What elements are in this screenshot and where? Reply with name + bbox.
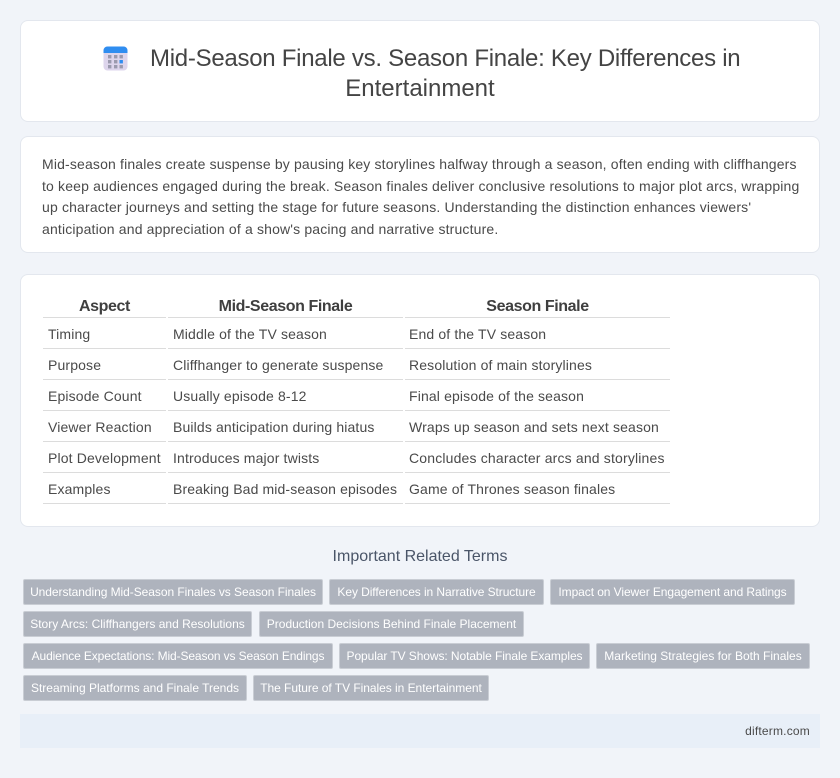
description text: anticipation and appreciation of a show's pacing and narrative structure. xyxy=(42,220,498,236)
related term tags: The Future of TV Finales in Entertainment xyxy=(260,681,482,695)
description text: up character journeys and setting the stage for future seasons. Understanding the distinction enhances viewers' xyxy=(42,199,751,215)
comparison table: Mid-Season Finale xyxy=(219,298,352,315)
related term tags: Impact on Viewer Engagement and Ratings xyxy=(558,585,787,599)
related term tags: Story Arcs: Cliffhangers and Resolutions xyxy=(30,617,245,631)
comparison table: Usually episode 8-12 xyxy=(173,388,307,404)
related term tags: Audience Expectations: Mid-Season vs Season Endings xyxy=(32,649,324,663)
heading: related terms: Important Related Terms xyxy=(333,548,507,565)
description text: to keep audiences engaged during the break. Season finales deliver conclusive resolutions to major plot arcs, wrapping xyxy=(42,178,799,194)
icon: calendar xyxy=(104,46,128,70)
related term tags: Production Decisions Behind Finale Placement xyxy=(267,617,516,631)
header card: Mid-Season Finale vs. Season Finale: Key Differences in xyxy=(150,45,740,72)
footer credit: difterm.com xyxy=(745,724,810,738)
comparison table: Middle of the TV season xyxy=(173,326,327,342)
comparison table: End of the TV season xyxy=(409,326,546,342)
comparison table: Builds anticipation during hiatus xyxy=(173,419,375,435)
comparison table: Introduces major twists xyxy=(173,450,319,466)
comparison table: Wraps up season and sets next season xyxy=(409,419,659,435)
related term tags: Understanding Mid-Season Finales vs Season Finales xyxy=(30,585,316,599)
comparison table xyxy=(43,298,670,504)
panel: comparison table xyxy=(20,274,820,527)
comparison table: Final episode of the season xyxy=(409,388,584,404)
header card: Entertainment xyxy=(345,75,495,102)
title xyxy=(150,45,740,102)
comparison table: Season Finale xyxy=(486,298,589,315)
comparison table: Timing xyxy=(48,326,90,342)
comparison table: Episode Count xyxy=(48,388,142,404)
description text: Mid-season finales create suspense by pausing key storylines halfway through a season, often ending with cliffhangers xyxy=(42,156,797,172)
related term tags: Popular TV Shows: Notable Finale Examples xyxy=(347,649,582,663)
comparison table: Breaking Bad mid-season episodes xyxy=(173,481,397,497)
description text xyxy=(42,156,799,237)
comparison table: Aspect xyxy=(79,298,130,315)
related term tags: Marketing Strategies for Both Finales xyxy=(604,649,802,663)
comparison table: Game of Thrones season finales xyxy=(409,481,615,497)
comparison table: Plot Development xyxy=(48,450,161,466)
panel: description xyxy=(20,136,820,253)
header card xyxy=(20,20,820,122)
related term tags: Key Differences in Narrative Structure xyxy=(337,585,536,599)
related term tags xyxy=(23,579,810,701)
related term tags: Streaming Platforms and Finale Trends xyxy=(31,681,239,695)
comparison table: Examples xyxy=(48,481,111,497)
comparison table: Purpose xyxy=(48,357,101,373)
comparison table: Concludes character arcs and storylines xyxy=(409,450,665,466)
comparison table: Viewer Reaction xyxy=(48,419,152,435)
footer bar xyxy=(20,714,820,748)
comparison table: Resolution of main storylines xyxy=(409,357,592,373)
comparison table: Cliffhanger to generate suspense xyxy=(173,357,383,373)
